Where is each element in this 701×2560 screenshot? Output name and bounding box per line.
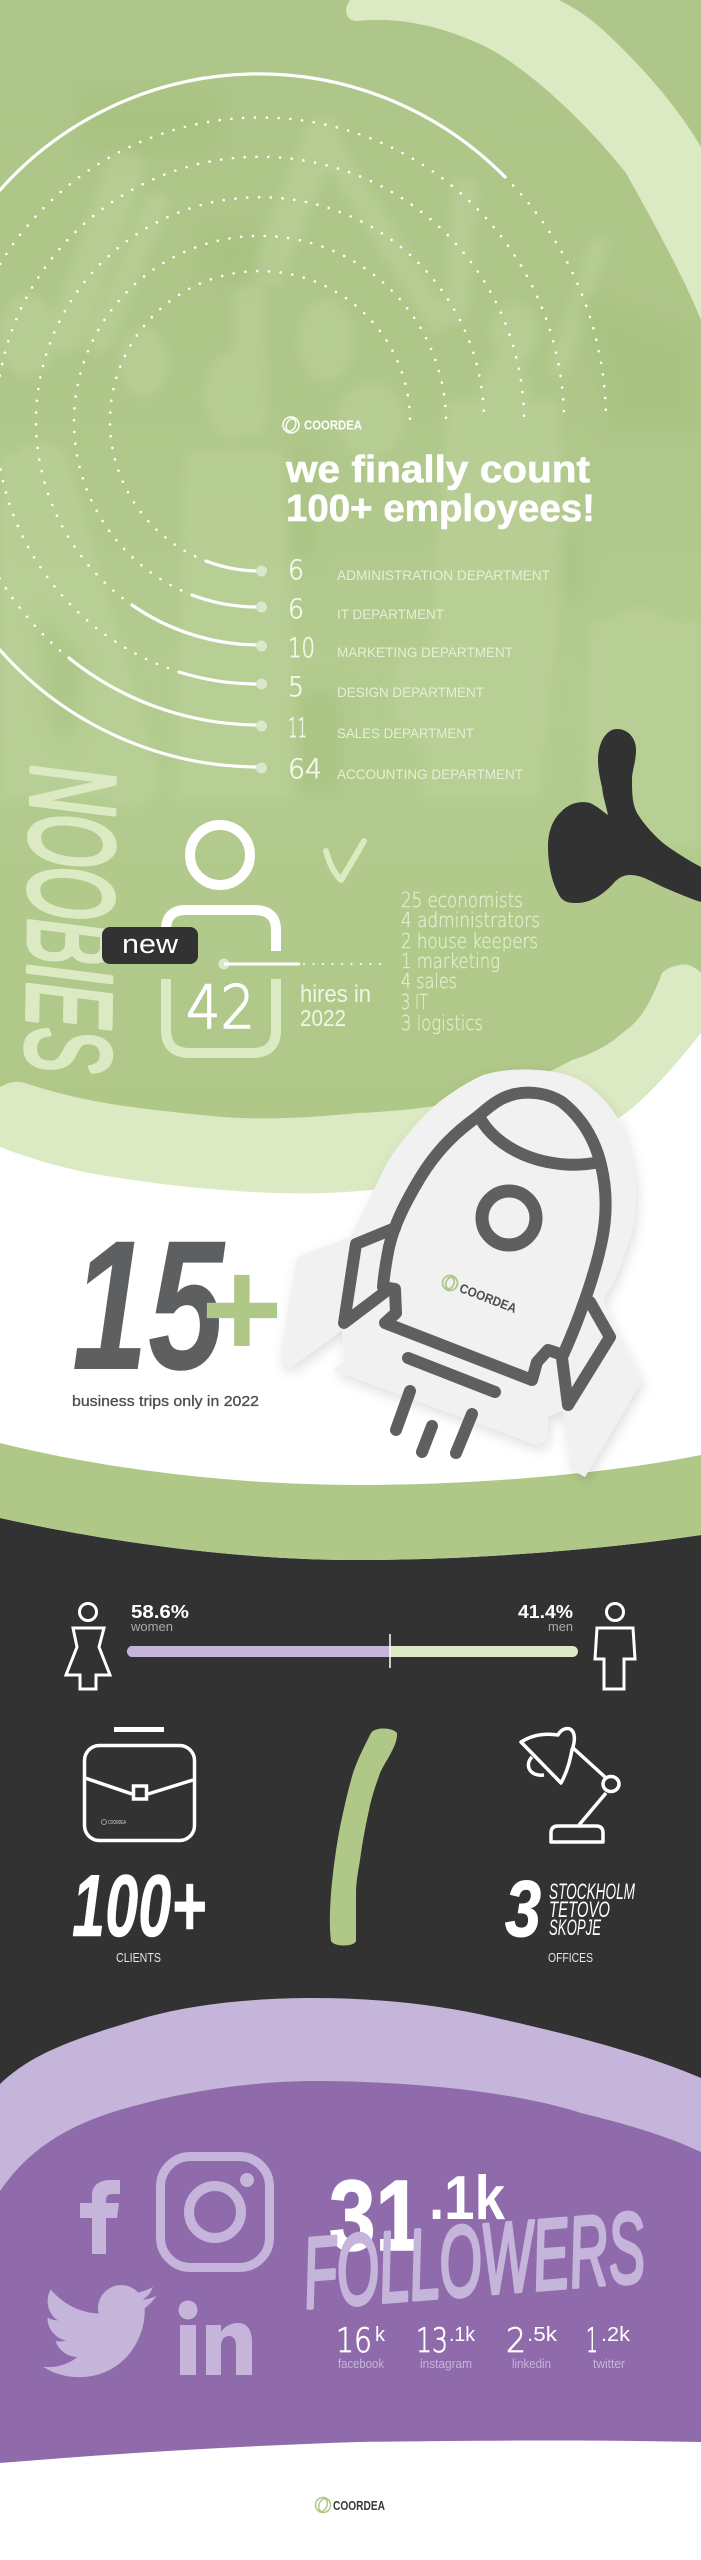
list: department counts: 6 [288, 594, 304, 625]
title: 100+ employees! [286, 488, 595, 530]
list: hires breakdown: 3 IT [401, 990, 428, 1014]
stats: per network followers: facebook [338, 2357, 385, 2371]
stat: offices: 3 [505, 1864, 541, 1953]
chart: gender split: 41.4% [518, 1602, 573, 1622]
title: we finally count [285, 449, 590, 491]
panel: hero band outer light green [0, 0, 701, 1193]
icon: facebook [80, 2180, 120, 2254]
decoration: top right light green arc [346, 0, 701, 320]
list: department counts: DESIGN DEPARTMENT [337, 684, 484, 700]
decoration: green slash [330, 1728, 397, 1946]
icon: linkedin [178, 2300, 252, 2375]
rocket logo [440, 1273, 519, 1316]
list: hires breakdown: 4 administrators [401, 908, 540, 932]
stat: 42 hires: 42 [186, 973, 255, 1043]
list: department counts: IT DEPARTMENT [337, 606, 444, 622]
stat: 15+ trips: 15 [72, 1203, 226, 1409]
icon: instagram [160, 2156, 270, 2268]
list: hires breakdown: 25 economists [401, 888, 523, 912]
icon: desk lamp [521, 1728, 619, 1842]
list: hires breakdown: 4 sales [401, 969, 457, 993]
stat: offices: STOCKHOLM [549, 1879, 635, 1904]
list: hires breakdown: 2 house keepers [401, 929, 538, 953]
list: hires breakdown [401, 888, 540, 1035]
stats: per network followers: 16 [336, 2321, 372, 2361]
stat: 42 hires: hires in [300, 981, 371, 1008]
list: department counts: MARKETING DEPARTMENT [337, 644, 513, 660]
list: department counts: 10 [288, 633, 315, 664]
stats: per network followers [336, 2321, 631, 2371]
decoration: noobies brush text: NOOBIES [1, 765, 140, 1074]
decoration: check mark [326, 841, 364, 880]
icon: new hire person [166, 825, 276, 1053]
icon: woman [66, 1604, 110, 1689]
list: hires breakdown: 1 marketing [401, 949, 500, 973]
stat: offices: TETOVO [549, 1897, 610, 1922]
icon: briefcase: COORDEA [108, 1820, 126, 1826]
stat: offices: OFFICES [548, 1950, 593, 1965]
chart: gender split [66, 1602, 635, 1689]
list: department counts: ACCOUNTING DEPARTMENT [337, 766, 523, 782]
stats: per network followers: .2k [601, 2324, 631, 2346]
stats: per network followers: twitter [593, 2357, 625, 2371]
panel: social purple [0, 2081, 701, 2463]
chart: gender split: 58.6% [131, 1602, 189, 1622]
chart: gender split: men [548, 1619, 573, 1634]
list: department counts: 11 [288, 713, 307, 744]
stat: 15+ trips: business trips only in 2022 [72, 1393, 259, 1410]
icon: man [595, 1604, 635, 1689]
stats: per network followers: k [375, 2324, 386, 2346]
stat: clients: CLIENTS [116, 1950, 161, 1965]
logo: top: COORDEA [304, 418, 362, 432]
rocket paper backing [280, 1069, 642, 1477]
chart: concentric department arcs [0, 74, 606, 773]
list: department counts: SALES DEPARTMENT [337, 725, 474, 741]
stat: total followers: .1k [429, 2164, 505, 2233]
list: department counts: 64 [288, 754, 322, 785]
stat: offices: SKOPJE [549, 1915, 601, 1940]
stat: clients [72, 1856, 206, 1965]
stats: per network followers: linkedin [512, 2357, 551, 2371]
stat: 15+ trips: + [201, 1230, 283, 1387]
logo: footer [316, 2498, 385, 2513]
stats: per network followers: 1 [586, 2321, 598, 2361]
logo: footer: COORDEA [333, 2498, 385, 2513]
decoration: green wave [0, 1443, 701, 1560]
panel: dark section [0, 1518, 701, 2200]
panel: light purple arc [0, 1998, 701, 2300]
list: department counts [288, 555, 550, 785]
stats: per network followers: 2 [506, 2321, 526, 2361]
list: department counts: 5 [288, 672, 304, 703]
decoration: black blob [548, 729, 701, 903]
list: department counts: 6 [288, 555, 304, 586]
icon: briefcase [84, 1727, 194, 1840]
rocket logo: COORDEA [457, 1280, 519, 1316]
stat: 42 hires: 2022 [300, 1005, 346, 1031]
logo: top [283, 417, 362, 433]
icon: rocket [280, 1069, 642, 1477]
stat: 42 hires [186, 973, 371, 1043]
stats: per network followers: .5k [527, 2324, 558, 2346]
label: new badge [102, 927, 198, 964]
rocket outline [344, 1093, 610, 1453]
title [285, 449, 595, 530]
stat: clients: 100+ [72, 1856, 206, 1955]
stats: per network followers: instagram [420, 2357, 472, 2371]
connector: hires to list [218, 958, 389, 970]
stat: total followers: 31 [329, 2160, 422, 2272]
photo: faded team photo [0, 135, 701, 850]
photo: darker foliage patches [40, 90, 701, 790]
stats: per network followers: 13 [416, 2321, 448, 2361]
stats: per network followers: .1k [449, 2324, 476, 2346]
list: hires breakdown: 3 logistics [401, 1011, 483, 1035]
icon: twitter [43, 2285, 156, 2377]
list: department counts: ADMINISTRATION DEPARTMENT [337, 567, 550, 583]
panel: hero green area [0, 0, 701, 1118]
stat: offices [505, 1864, 635, 1965]
label: new badge: new [122, 929, 179, 959]
chart: gender split: women [130, 1619, 173, 1634]
